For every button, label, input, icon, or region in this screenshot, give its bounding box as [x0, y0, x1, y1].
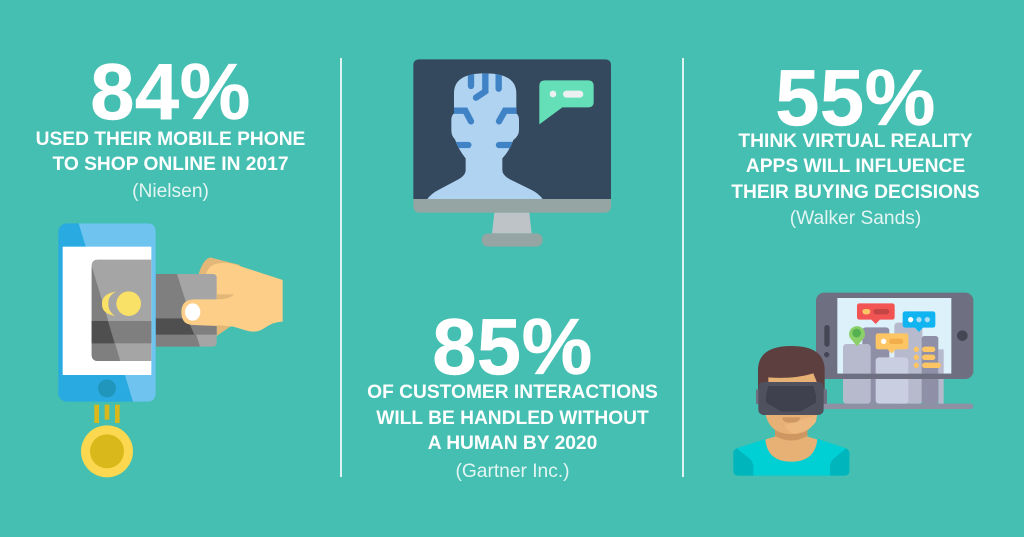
description: customer interactions: WILL BE HANDLED WITHOUT	[376, 408, 649, 429]
description: virtual reality: THINK VIRTUAL REALITY	[738, 130, 973, 152]
number: 55%: 55%	[775, 53, 936, 142]
stat block: 85%	[367, 302, 658, 482]
icon: phone payment with card and hand	[58, 223, 283, 477]
divider left	[340, 58, 342, 477]
description: virtual reality: APPS WILL INFLUENCE	[746, 156, 965, 177]
number: 85%: 85%	[432, 302, 593, 391]
description: mobile shopping: USED THEIR MOBILE PHONE	[36, 128, 305, 150]
icon: person in VR headset with phone and city scene	[733, 293, 973, 476]
source: Walker Sands: (Walker Sands)	[790, 208, 921, 229]
description: virtual reality	[731, 130, 980, 203]
stat block: 84%	[36, 47, 305, 202]
description: customer interactions	[367, 382, 658, 454]
stat block: 55%	[731, 53, 980, 229]
divider right	[682, 58, 684, 477]
icon: monitor with AI head and chat bubble	[413, 59, 611, 247]
description: mobile shopping	[36, 128, 305, 175]
description: virtual reality: THEIR BUYING DECISIONS	[731, 182, 980, 203]
number: 84%: 84%	[90, 47, 251, 136]
description: mobile shopping: TO SHOP ONLINE IN 2017	[52, 154, 288, 175]
description: customer interactions: OF CUSTOMER INTERACTIONS	[367, 382, 658, 403]
source: Nielsen: (Nielsen)	[132, 181, 209, 202]
description: customer interactions: A HUMAN BY 2020	[428, 433, 597, 454]
source: Gartner: (Gartner Inc.)	[455, 461, 570, 482]
